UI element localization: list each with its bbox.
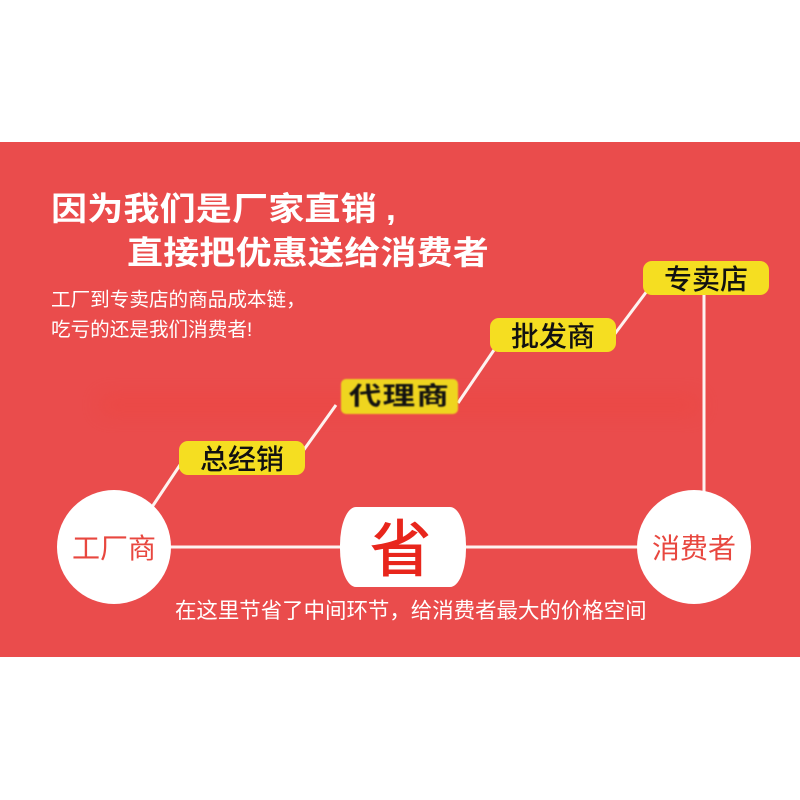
circle: 消费者: 消费者: [652, 533, 736, 564]
label: 总经销: [179, 441, 305, 475]
circle: 工厂商: [57, 490, 171, 604]
savings badge: 省: [340, 507, 466, 587]
heading line 1: 因为我们是厂家直销,: [51, 190, 396, 227]
soft red glow behind the chain: [100, 396, 700, 414]
label: 批发商: 批发商: [511, 321, 595, 352]
red background band: [0, 142, 800, 657]
subtext line 2: 吃亏的还是我们消费者!: [51, 319, 252, 341]
label: garbled distributor tag: 代理商: [349, 382, 450, 411]
subtext line 1: 工厂到专卖店的商品成本链，: [51, 289, 306, 311]
savings badge: 省: 省: [369, 516, 432, 585]
heading line 2: 直接把优惠送给消费者: [127, 234, 489, 271]
label: 专卖店: [643, 261, 769, 295]
caption: 在这里节省了中间环节，给消费者最大的价格空间: [175, 599, 647, 623]
label: 批发商: [490, 318, 616, 352]
label: 专卖店: 专卖店: [664, 264, 748, 295]
label: 总经销: 总经销: [200, 444, 284, 475]
circle: 消费者: [637, 490, 751, 604]
circle: 工厂商: 工厂商: [72, 533, 156, 564]
